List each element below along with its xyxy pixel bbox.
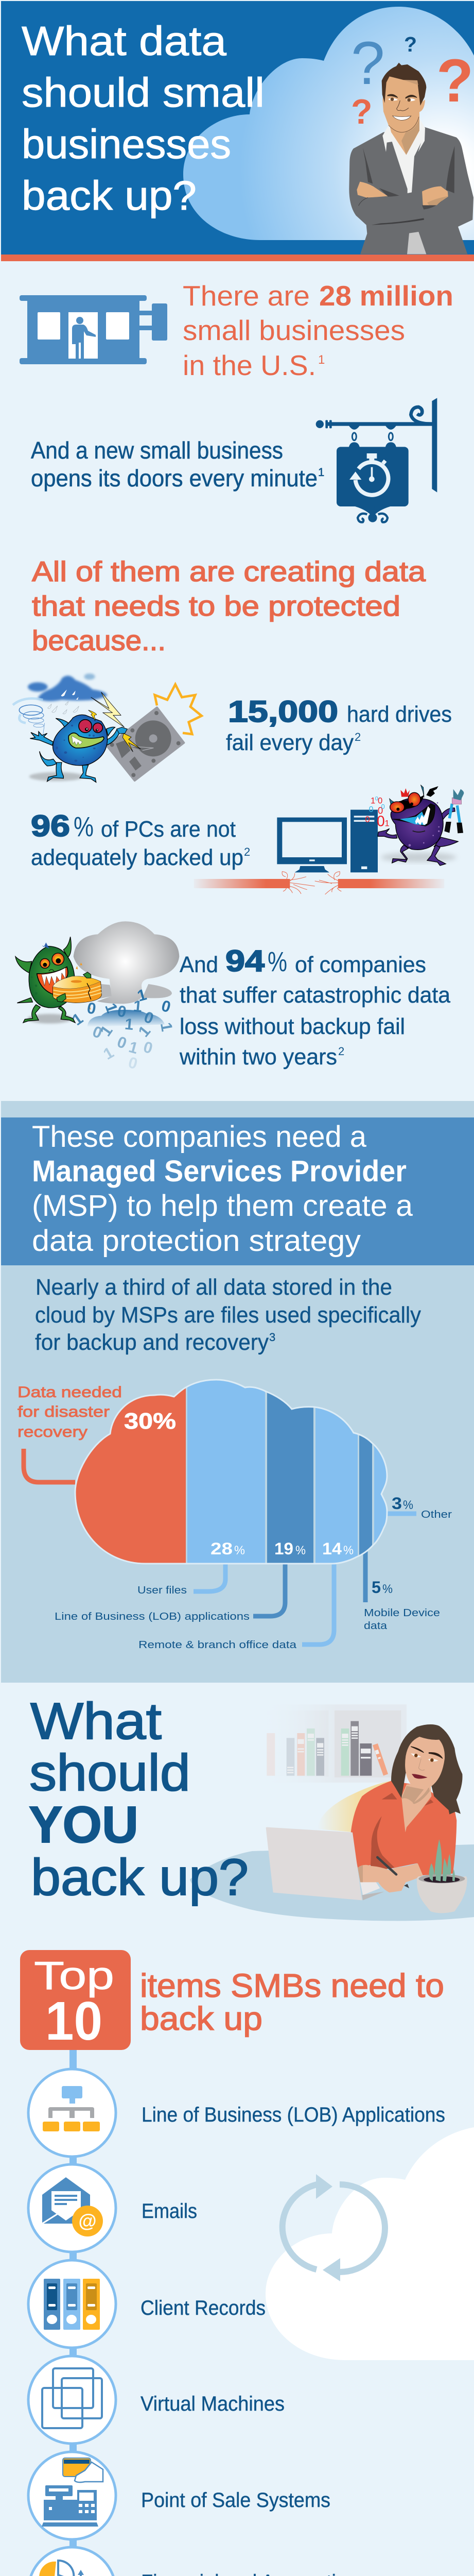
text: 94% of companies: within two years bbox=[179, 1044, 337, 1070]
text: 15,000 hard drives: 2 bbox=[355, 731, 361, 743]
list item: client records bbox=[28, 2260, 266, 2348]
icon: storefront building bbox=[20, 295, 167, 364]
question marks: ? bbox=[436, 47, 473, 115]
text: new small business every minute: 1 bbox=[318, 466, 324, 479]
chart category labels: 5 bbox=[372, 1578, 381, 1597]
chart value labels bbox=[124, 1409, 354, 1558]
text: 94% of companies: % bbox=[268, 946, 287, 977]
pliers bbox=[449, 804, 460, 823]
list item: line of business applications bbox=[28, 2069, 445, 2157]
green monster bbox=[15, 937, 75, 1023]
blue cloud bbox=[87, 1010, 165, 1027]
text: new small business every minute bbox=[31, 437, 324, 492]
icon: binders bbox=[44, 2279, 100, 2330]
list item: virtual machines bbox=[28, 2356, 285, 2444]
heading: MSP: Managed Services Provider bbox=[32, 1155, 407, 1188]
text: 28 million small businesses: There are bbox=[183, 280, 310, 312]
disks bbox=[53, 976, 101, 1003]
text: 94% of companies: of companies bbox=[295, 952, 426, 977]
list item: client records: Client Records bbox=[141, 2297, 266, 2319]
list item: point of sale systems bbox=[28, 2452, 330, 2539]
heading: top 10 items: items SMBs need to bbox=[140, 1967, 444, 2004]
panel: managed services provider bbox=[1, 1101, 474, 1683]
binary digits: 0 bbox=[369, 805, 374, 814]
icon: hanging sign with stopwatch bbox=[316, 398, 437, 522]
title: What data bbox=[22, 18, 227, 64]
binary digits: 0 bbox=[160, 997, 172, 1016]
binary digits: 1 bbox=[101, 1001, 121, 1015]
monster bbox=[30, 715, 127, 782]
chart category labels: Other bbox=[421, 1509, 452, 1520]
title: should small bbox=[22, 70, 265, 115]
text: 94% of companies: loss without backup fail bbox=[180, 1014, 405, 1039]
binary digits: 0 bbox=[365, 815, 370, 824]
text: nearly a third bbox=[35, 1275, 421, 1355]
panel: header bbox=[1, 1, 474, 261]
text: 96% of PCs bbox=[31, 809, 250, 870]
icon: overlapping windows bbox=[42, 2368, 102, 2428]
binary digits: 1 bbox=[157, 1021, 175, 1033]
arm, pen and paper bbox=[360, 1880, 380, 1895]
list item: emails bbox=[28, 2164, 197, 2252]
binary digits bbox=[69, 986, 175, 1073]
text: 15,000 hard drives bbox=[226, 695, 452, 755]
binary digits: 1 bbox=[69, 1010, 86, 1029]
binary digits: 1 bbox=[97, 1022, 116, 1040]
binary digits: 0 bbox=[377, 813, 385, 829]
laptop bbox=[362, 1892, 384, 1900]
binary digits: 0 bbox=[116, 1002, 128, 1021]
illustration: blue monster breaking hard drive bbox=[13, 673, 202, 782]
burst bbox=[155, 684, 202, 734]
heading: top 10 items: back up bbox=[140, 2000, 262, 2037]
heading: MSP bbox=[32, 1120, 413, 1258]
text: 28 million small businesses bbox=[183, 280, 453, 381]
illustration: computer, purple monster and severed cable bbox=[194, 785, 464, 894]
text: 96% of PCs: % bbox=[74, 811, 94, 842]
binary digits: 0 bbox=[381, 803, 385, 810]
binary digits: 1 bbox=[135, 1022, 154, 1040]
binary digits: 1 bbox=[135, 986, 148, 1005]
chart value labels: % bbox=[343, 1544, 354, 1557]
title: businesses bbox=[22, 121, 231, 167]
chart category labels bbox=[55, 1494, 452, 1651]
chart value labels: 14 bbox=[322, 1539, 342, 1558]
question marks: ? bbox=[351, 29, 385, 97]
binary digits bbox=[365, 795, 390, 829]
binary digits: 0 bbox=[375, 795, 378, 802]
text: 28 million small businesses: in the U.S. bbox=[183, 349, 316, 381]
illustration: green monster eating disks under mushroom cloud bbox=[15, 921, 179, 1073]
heading: MSP: (MSP) to help them create a bbox=[32, 1189, 413, 1223]
label: data needed for disaster recovery bbox=[17, 1384, 122, 1440]
heading: all creating data: because... bbox=[32, 624, 166, 656]
list item: point of sale systems: Point of Sale Systems bbox=[141, 2489, 330, 2512]
chart category labels: Mobile Device bbox=[364, 1607, 440, 1619]
question marks bbox=[351, 29, 473, 131]
heading: MSP: These companies need a bbox=[32, 1120, 367, 1154]
header cloud bbox=[183, 7, 474, 240]
chart category labels: data bbox=[364, 1620, 388, 1632]
connectors bbox=[24, 1449, 416, 1645]
label: data needed for disaster recovery: for disaster bbox=[17, 1403, 110, 1420]
binary digits: 0 bbox=[142, 1038, 154, 1057]
text: new small business every minute: opens its doors every minute bbox=[31, 465, 318, 492]
heading: what should you back up bbox=[29, 1692, 249, 1906]
heading: top 10 items: 10 bbox=[45, 1991, 102, 2052]
shadow bbox=[381, 853, 457, 862]
list item: virtual machines: Virtual Machines bbox=[141, 2393, 285, 2415]
text: 94% of companies: 2 bbox=[338, 1045, 344, 1058]
heading: what should you back up: should bbox=[29, 1744, 190, 1802]
text: 96% of PCs: of PCs are not bbox=[101, 817, 236, 842]
chart value labels: 28 bbox=[210, 1539, 233, 1558]
text: 96% of PCs: 96 bbox=[31, 809, 70, 843]
chart category labels: 3 bbox=[392, 1494, 402, 1513]
text: 94% of companies bbox=[179, 944, 451, 1070]
text: nearly a third: 3 bbox=[269, 1331, 275, 1344]
heading: what should you back up: back up? bbox=[31, 1849, 249, 1906]
icon: org chart bbox=[43, 2086, 100, 2131]
heading: MSP: data protection strategy bbox=[32, 1224, 361, 1258]
chart category labels: User files bbox=[137, 1585, 187, 1596]
chart category labels: % bbox=[403, 1498, 413, 1512]
text: 94% of companies: that suffer catastrophic data bbox=[180, 982, 451, 1008]
binary digits: 0 bbox=[90, 1023, 104, 1042]
title: back up? bbox=[22, 173, 197, 218]
chart value labels: 30% bbox=[124, 1409, 176, 1434]
heading: what should you back up: What bbox=[30, 1692, 162, 1750]
text: 15,000 hard drives: hard drives bbox=[347, 702, 452, 727]
plant bbox=[429, 1839, 455, 1882]
illustration: woman at laptop bbox=[190, 1704, 474, 1921]
hair and face bbox=[391, 1724, 463, 1815]
label: data needed for disaster recovery: Data needed bbox=[17, 1384, 122, 1401]
text: 28 million small businesses: 1 bbox=[318, 353, 325, 367]
chart category labels: Line of Business (LOB) applications bbox=[55, 1611, 250, 1622]
text: 96% of PCs: 2 bbox=[244, 845, 250, 858]
binary digits: 0 bbox=[85, 999, 97, 1018]
tower bbox=[350, 810, 378, 872]
text: 94% of companies: 94 bbox=[225, 944, 265, 978]
heading: top 10 items: Top bbox=[34, 1954, 114, 1998]
text: 28 million small businesses: small businesses bbox=[183, 314, 405, 346]
heading: all creating data bbox=[32, 555, 426, 656]
text: 96% of PCs: adequately backed up bbox=[31, 845, 243, 870]
heading: top 10 items bbox=[20, 1950, 444, 2052]
heading: all creating data: that needs to be protected bbox=[32, 590, 400, 622]
binary digits: 1 bbox=[371, 795, 375, 805]
text: new small business every minute: And a new small business bbox=[31, 437, 283, 464]
chart value labels: % bbox=[295, 1544, 306, 1557]
heading: what should you back up: YOU bbox=[29, 1796, 138, 1854]
icon: sync arrows bbox=[283, 2174, 385, 2281]
binary digits: 1 bbox=[100, 1044, 117, 1063]
heading: all creating data: All of them are creating data bbox=[32, 555, 426, 587]
list item: emails: Emails bbox=[142, 2200, 197, 2223]
chart: cloud breakdown bbox=[17, 1376, 452, 1651]
chart category labels: Remote & branch office data bbox=[138, 1639, 297, 1651]
list item: line of business applications: Line of Business (LOB) Applications bbox=[142, 2104, 445, 2126]
decorative cloud with sync arrows bbox=[266, 2127, 474, 2360]
text: nearly a third: for backup and recovery bbox=[35, 1330, 269, 1355]
binary digits: 1 bbox=[127, 1038, 140, 1057]
chart value labels: 19 bbox=[274, 1539, 293, 1558]
text: 94% of companies: And bbox=[180, 952, 218, 977]
icon: cash register and card bbox=[42, 2458, 103, 2527]
question marks: ? bbox=[351, 92, 373, 131]
text: 28 million small businesses: 28 million bbox=[319, 280, 453, 312]
text: 15,000 hard drives: fail every day bbox=[226, 730, 354, 755]
hard drive bbox=[107, 707, 184, 781]
question marks: ? bbox=[404, 32, 417, 56]
cloud segments bbox=[72, 1376, 390, 1566]
binary digits: 1 bbox=[133, 997, 143, 1015]
binary digits: 0 bbox=[142, 1008, 156, 1027]
shirt bbox=[351, 1781, 457, 1875]
text: nearly a third: cloud by MSPs are files used specifically bbox=[35, 1302, 421, 1328]
binary digits: 1 bbox=[124, 1015, 134, 1033]
title bbox=[22, 18, 265, 218]
binary digits: 1 bbox=[384, 818, 390, 828]
purple monster bbox=[378, 798, 458, 866]
icon: envelope with at sign: @ bbox=[78, 2210, 97, 2231]
text: nearly a third: Nearly a third of all data stored in the bbox=[36, 1275, 392, 1300]
text: 15,000 hard drives: 15,000 bbox=[228, 695, 338, 728]
mushroom cloud bbox=[143, 984, 172, 998]
chair bbox=[318, 1781, 391, 1833]
cable bbox=[194, 872, 444, 894]
man with crossed arms bbox=[349, 63, 473, 254]
binary digits: 0 bbox=[378, 795, 382, 805]
chart value labels: % bbox=[234, 1544, 245, 1557]
bookshelf bbox=[257, 1704, 407, 1783]
icon: pie chart, graph and money bbox=[37, 2561, 113, 2576]
binary digits: 0 bbox=[115, 1033, 129, 1053]
monitor bbox=[277, 818, 347, 864]
binary digits: 0 bbox=[378, 805, 383, 816]
binary digits: 0 bbox=[127, 1054, 139, 1073]
label: data needed for disaster recovery: recovery bbox=[17, 1423, 87, 1440]
icon: envelope with at sign bbox=[42, 2177, 103, 2236]
list item: financial and accounting applications bbox=[28, 2547, 358, 2576]
chart category labels: % bbox=[382, 1582, 393, 1596]
